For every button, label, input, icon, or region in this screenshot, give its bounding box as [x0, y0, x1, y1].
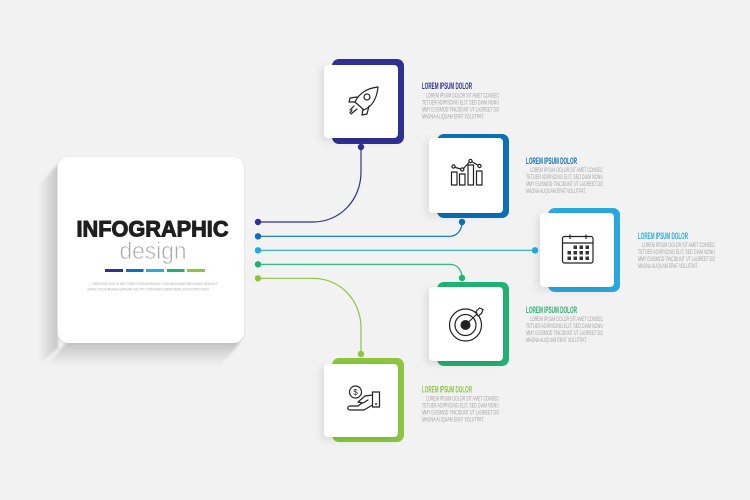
text: target card: LOREM IPSUM DOLOR SIT AMET CONSEC	[530, 317, 603, 323]
text: chart card	[526, 156, 603, 195]
main card description	[87, 281, 218, 292]
panel: target card	[429, 282, 509, 366]
text: money card: MMY EUISMOD TINCIDUNT UT LAOREET DO	[422, 410, 499, 416]
connector: sky line to calendar card	[255, 247, 538, 254]
connector: green line to target card	[255, 261, 465, 281]
text: target card	[526, 305, 603, 344]
text: chart card: TETUER ADIPISCING ELIT, SED DIAM NONU	[526, 175, 603, 181]
text: chart card: MMY EUISMOD TINCIDUNT UT LAOREET DO	[526, 182, 603, 188]
text: money card: LOREM IPSUM DOLOR	[422, 384, 472, 394]
connector: navy line to rocket card	[255, 144, 364, 225]
colour key bars	[105, 269, 205, 272]
text: calendar card: LOREM IPSUM DOLOR	[638, 231, 688, 241]
text: rocket card: LOREM IPSUM DOLOR	[422, 81, 472, 91]
title: infographic: INFOGRAPHIC	[76, 217, 229, 242]
text: money card: LOREM IPSUM DOLOR SIT AMET CONSEC	[426, 396, 499, 402]
text: rocket card	[422, 81, 499, 120]
text: money card	[422, 384, 499, 424]
text: money card: TETUER ADIPISCING ELIT, SED DIAM NONU	[422, 404, 499, 410]
text: chart card: LOREM IPSUM DOLOR SIT AMET CONSEC	[530, 168, 603, 174]
panel: main title card	[58, 157, 244, 343]
text: target card: MMY EUISMOD TINCIDUNT UT LAOREET DO	[526, 331, 603, 337]
icon: calendar	[562, 234, 593, 263]
text: target card: LOREM IPSUM DOLOR	[526, 305, 577, 315]
connector: lime line to money card	[255, 275, 364, 357]
connector: blue line to chart card	[255, 219, 465, 240]
text: rocket card: LOREM IPSUM DOLOR SIT AMET CONSEC	[426, 94, 499, 100]
text: rocket card: TETUER ADIPISCING ELIT, SED DIAM NONU	[422, 100, 499, 106]
text: calendar card: MAGNA ALIQUAM ERAT VOLUTPAT.	[638, 264, 698, 270]
text: rocket card: MMY EUISMOD TINCIDUNT UT LAOREET DO	[422, 108, 499, 114]
icon: hand with coin: $	[353, 388, 358, 397]
main card description: LAOREET DOLOR MAGNA ALIQUAM ERAT VOLUTPAT. UT WISI ENIM AD MINIM VENIAM, QUIS NOSTRUD EXERCI	[87, 286, 209, 292]
icon: target	[450, 308, 483, 341]
text: target card: TETUER ADIPISCING ELIT, SED DIAM NONU	[526, 324, 603, 330]
panel: chart card	[429, 134, 509, 218]
panel: calendar card	[540, 208, 620, 292]
text: calendar card	[638, 231, 715, 270]
text: chart card: LOREM IPSUM DOLOR	[526, 156, 577, 166]
text: chart card: MAGNA ALIQUAM ERAT VOLUTPAT.	[526, 189, 586, 195]
text: target card: MAGNA ALIQUAM ERAT VOLUTPAT.	[526, 338, 587, 344]
text: money card: MAGNA ALIQUAM ERAT VOLUTPAT.	[422, 418, 484, 424]
subtitle: design: design	[120, 238, 186, 265]
text: rocket card: MAGNA ALIQUAM ERAT VOLUTPAT.	[422, 114, 484, 120]
main card description: LOREM IPSUM DOLOR SIT AMET, CONSECTETUER ADIPISCING ELIT, SED DIAM NONUMMY NIBH EUISMOD TINCIDUNT UT	[92, 281, 218, 286]
icon: rocket	[349, 87, 378, 115]
panel: rocket card	[324, 59, 404, 144]
main card long shadow	[38, 164, 240, 366]
panel: money card	[324, 358, 404, 442]
icon: bar chart	[452, 159, 482, 185]
